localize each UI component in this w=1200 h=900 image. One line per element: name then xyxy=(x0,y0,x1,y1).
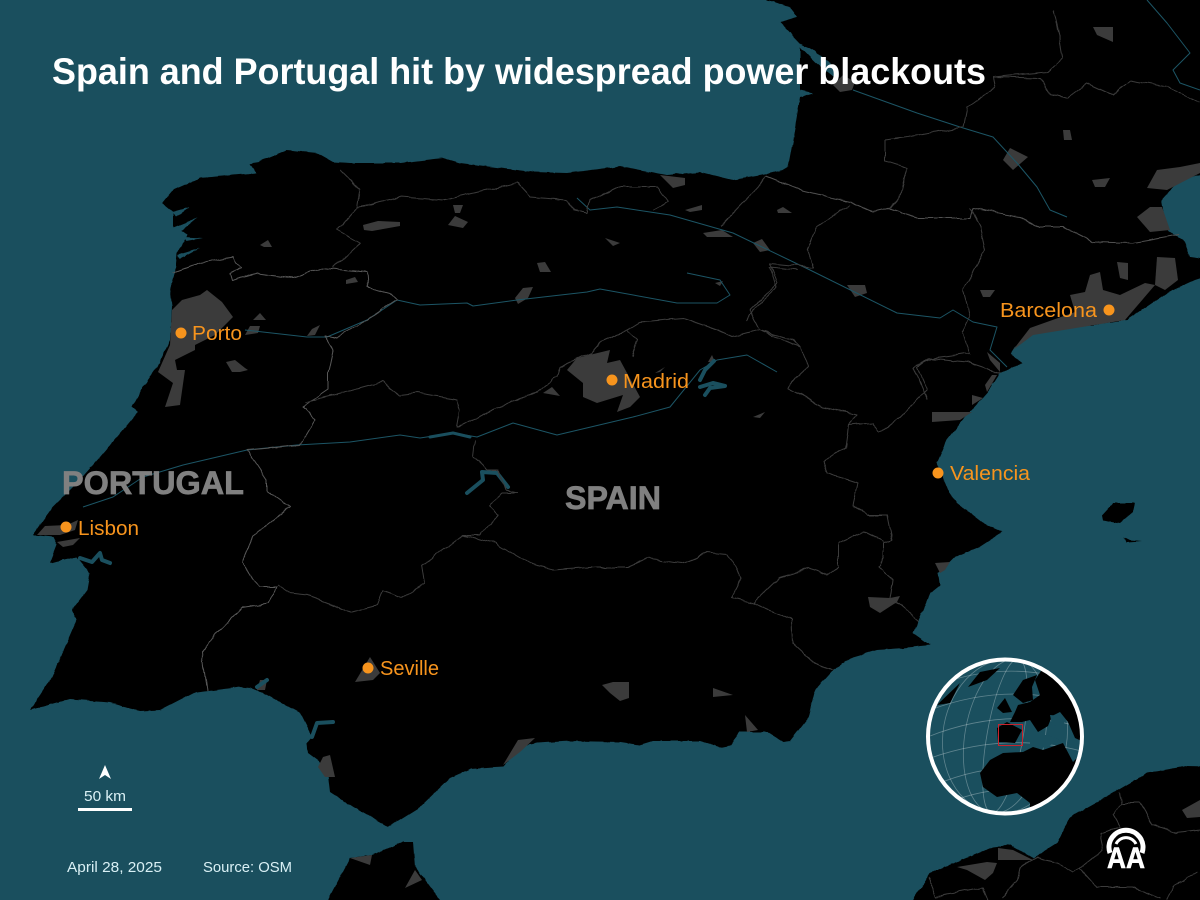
globe: Scandinavia xyxy=(1013,675,1037,703)
globe: Europe and Asia xyxy=(1010,670,1080,740)
land: Ibiza and Formentera xyxy=(1102,503,1142,542)
scale bar: 50 km xyxy=(84,788,126,805)
north arrow xyxy=(99,765,111,779)
city marker: Porto: Porto xyxy=(192,323,242,345)
scale bar xyxy=(78,788,132,811)
globe: Iberia xyxy=(997,722,1022,743)
globe: outer ring xyxy=(928,660,1082,814)
rivers and reservoirs xyxy=(80,0,1200,737)
Anadolu Agency logo xyxy=(1107,830,1145,875)
date: April 28, 2025 xyxy=(67,859,162,876)
city marker: Lisbon: Lisbon xyxy=(78,518,139,540)
Anadolu Agency logo: AA xyxy=(1107,842,1145,875)
title: Spain and Portugal hit by widespread power blackouts xyxy=(52,51,986,92)
city marker: Madrid: Madrid xyxy=(623,371,689,393)
globe: Africa xyxy=(980,743,1077,808)
locator globe xyxy=(926,658,1084,816)
land: Galician inlets xyxy=(172,207,203,259)
source: Source: OSM xyxy=(203,859,292,876)
globe: selected area xyxy=(998,724,1022,746)
country label: Spain: SPAIN xyxy=(565,480,661,516)
country label: Portugal: PORTUGAL xyxy=(62,465,244,501)
city marker: Barcelona: Barcelona xyxy=(1000,300,1098,322)
land: North Africa xyxy=(318,766,1200,900)
globe: inland seas xyxy=(1030,715,1065,748)
globe: Greenland xyxy=(937,668,1000,705)
city marker: Valencia: Valencia xyxy=(950,463,1031,485)
globe: Britain xyxy=(997,698,1012,713)
city marker: Seville: Seville xyxy=(380,658,439,680)
